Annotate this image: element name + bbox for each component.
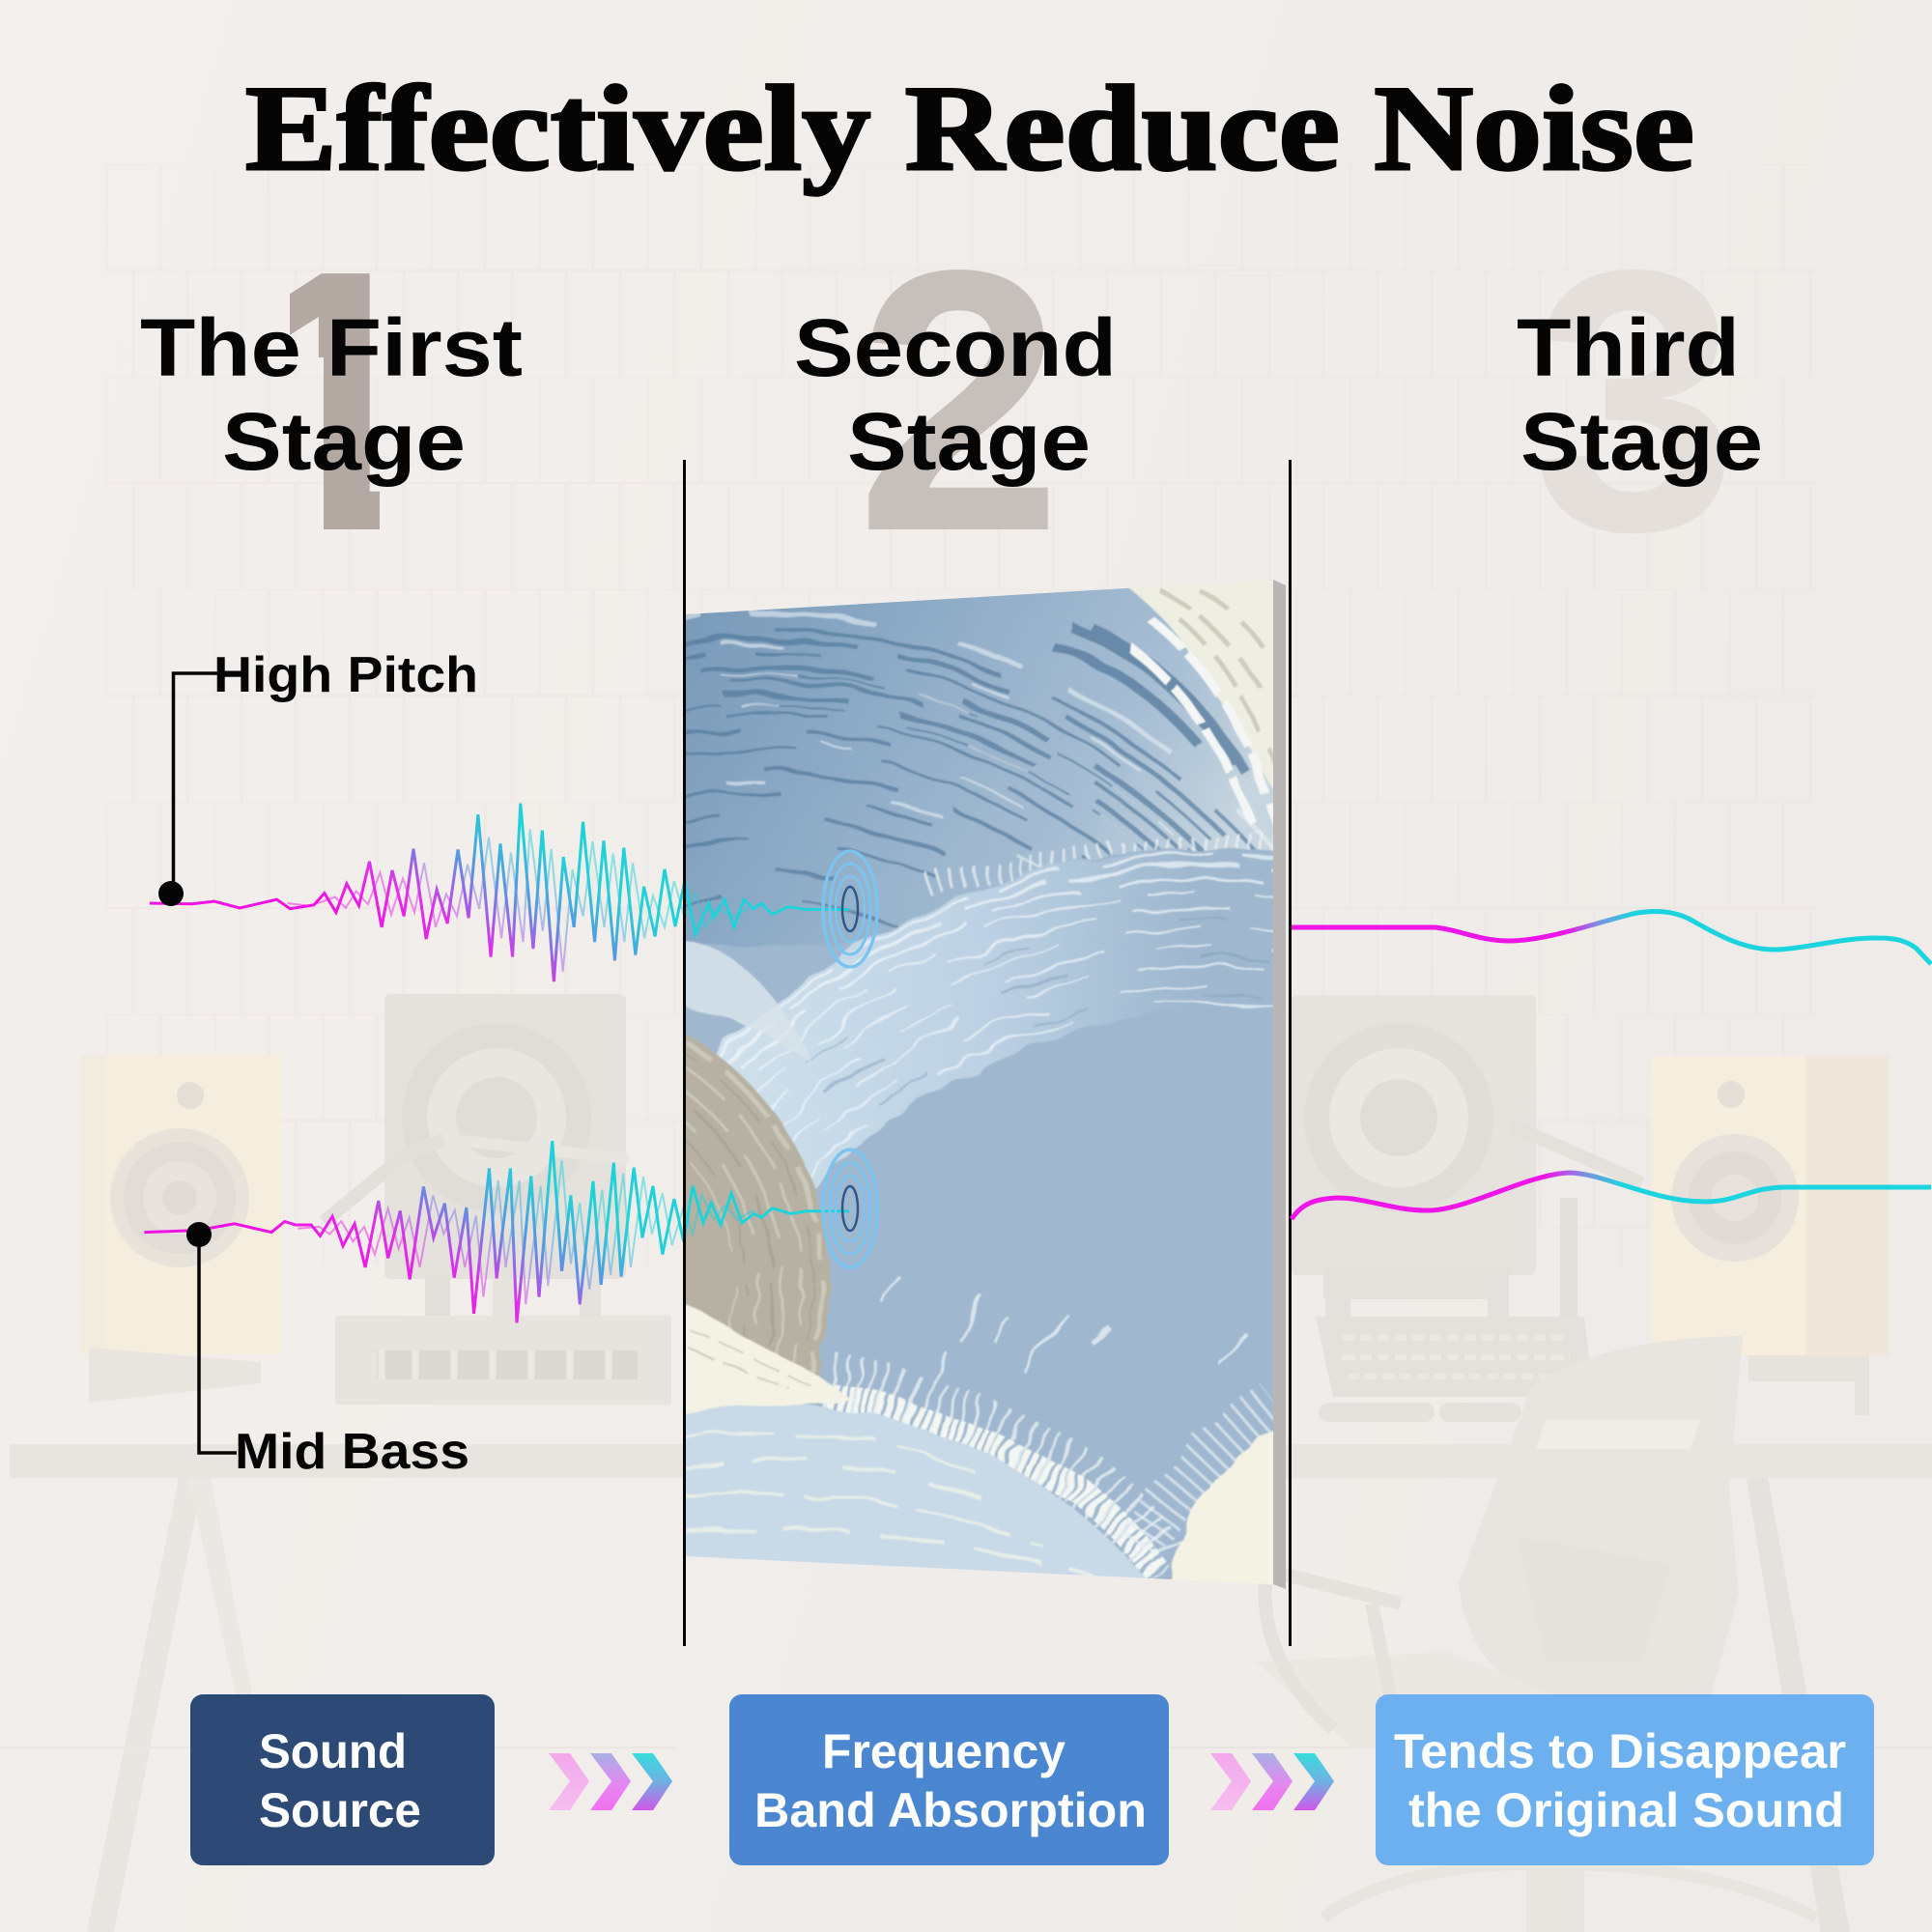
stage numbers — [232, 192, 1738, 609]
right keyboard — [1316, 1317, 1594, 1422]
sparse white streaks in blob — [884, 1275, 1251, 1381]
divider line: left — [683, 460, 686, 1646]
callout: high pitch — [158, 647, 478, 906]
heading: second stage: Stage — [847, 396, 1091, 487]
wave: high pitch — [150, 804, 849, 981]
title: Effectively Reduce Noise — [245, 62, 1694, 196]
panel side edge — [1273, 580, 1286, 1589]
step box: sound source: Sound — [259, 1724, 407, 1778]
right yellow speaker — [1652, 1056, 1889, 1415]
callout: mid bass — [186, 1222, 469, 1480]
panel: absorbing acoustic panel — [686, 580, 1286, 1589]
callout: high pitch: High Pitch — [213, 647, 478, 703]
tan fur region — [686, 1034, 833, 1377]
step box: frequency band absorption: Frequency — [822, 1724, 1065, 1778]
stage numbers: 1 — [232, 192, 439, 609]
cream corner at upper right — [1128, 580, 1273, 790]
step box: tends to disappear: the Original Sound — [1408, 1783, 1844, 1837]
heading: first stage: Stage — [222, 396, 466, 487]
light crescent — [716, 847, 1254, 1189]
heading: third stage — [1517, 302, 1763, 487]
right studio monitor — [1291, 995, 1642, 1323]
cream corner at lower right — [1171, 1430, 1273, 1584]
heading: third stage: Stage — [1520, 396, 1763, 487]
step box: frequency band absorption: Band Absorption — [754, 1783, 1147, 1837]
stage numbers: 2 — [856, 192, 1063, 609]
divider line: right — [1289, 460, 1292, 1646]
light patch over tan top edge — [676, 942, 811, 1063]
residual wave: low — [1292, 1173, 1931, 1219]
step box: sound source — [190, 1694, 495, 1865]
left studio monitor — [324, 994, 628, 1319]
desk — [0, 1444, 1932, 1932]
step box: sound source: Source — [259, 1783, 421, 1837]
step box: tends to disappear: Tends to Disappear — [1394, 1724, 1846, 1778]
heading: first stage: The First — [140, 302, 523, 393]
left keyboard — [335, 1316, 671, 1405]
wave: mid bass — [144, 1141, 849, 1322]
cluster of dark fur at upper right — [1053, 628, 1246, 773]
step box: tends to disappear — [1376, 1694, 1874, 1865]
blob bottom white fur band — [831, 1381, 1159, 1560]
cream fur band — [686, 1304, 850, 1414]
heading: first stage — [140, 302, 523, 487]
target rings: mid bass — [823, 1150, 877, 1267]
pale blue dome — [686, 1404, 1146, 1578]
heading: second stage — [794, 302, 1117, 487]
arrows: second chevrons — [1210, 1753, 1334, 1810]
panel painted surface — [686, 580, 1273, 1579]
office chair — [1256, 1336, 1816, 1932]
arrows: first chevrons — [549, 1753, 672, 1810]
step box: frequency band absorption — [729, 1694, 1169, 1865]
target rings: high pitch — [823, 851, 877, 967]
heading: third stage: Third — [1517, 302, 1740, 393]
heading: second stage: Second — [794, 302, 1117, 393]
stage numbers: 3 — [1531, 192, 1738, 609]
callout: mid bass: Mid Bass — [235, 1424, 469, 1480]
left yellow speaker — [81, 1055, 282, 1403]
residual wave: high — [1292, 912, 1931, 964]
